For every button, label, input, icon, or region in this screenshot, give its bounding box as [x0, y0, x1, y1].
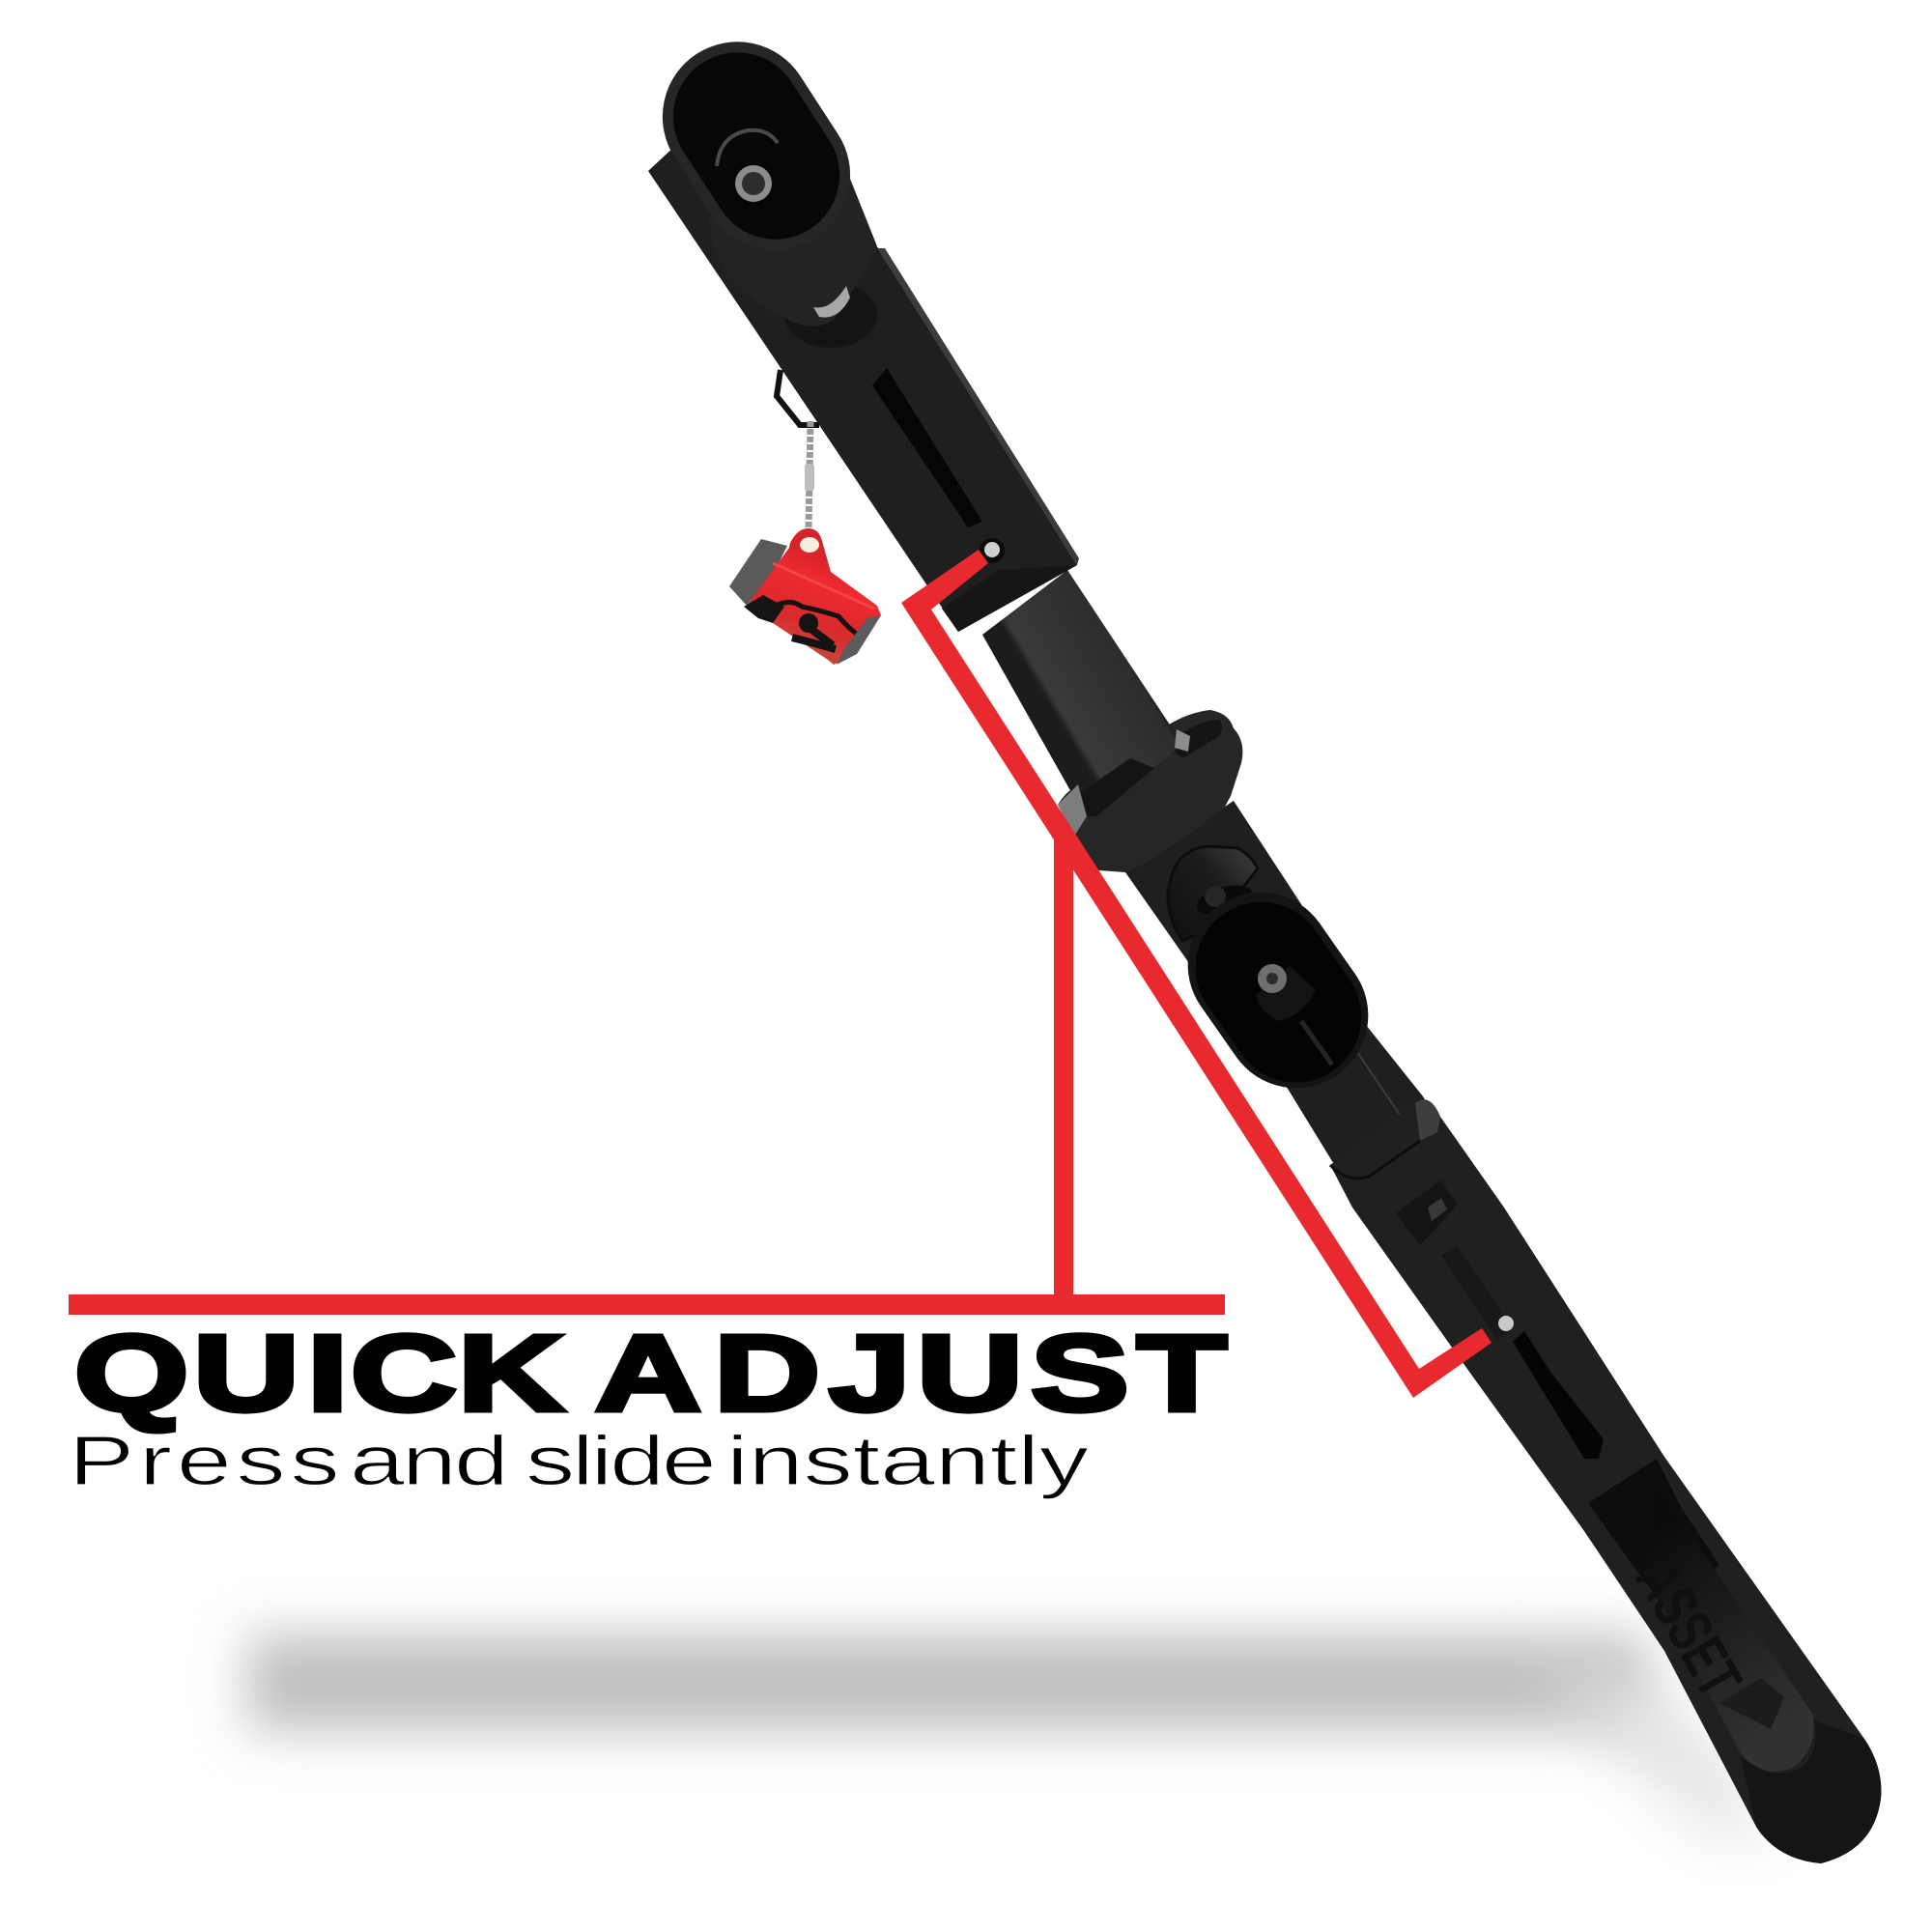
- callout: horizontal rule: [69, 1294, 1225, 1315]
- lower cup: [1159, 864, 1397, 1117]
- top mount collar: [784, 282, 877, 348]
- top cup: [641, 20, 871, 271]
- top mount strap band: [709, 174, 877, 327]
- top cup washer arc: [717, 130, 778, 166]
- foot arrow mark: [1719, 1678, 1784, 1729]
- lower slot: [1513, 1331, 1604, 1459]
- lower sleeve latch detail: [1396, 1180, 1513, 1341]
- lower cup washer: [1256, 966, 1316, 1021]
- lower cup slit: [1301, 1021, 1332, 1065]
- foot tip shade: [1741, 1719, 1881, 1863]
- subheading: and: [350, 1422, 506, 1499]
- product: adjustable rod: [641, 20, 1881, 1863]
- foot recess: [1644, 1485, 1814, 1772]
- lower sleeve seam and bumps: [1330, 1099, 1440, 1179]
- upper sleeve end shade: [942, 565, 1077, 632]
- callout: vertical leader: [1054, 837, 1073, 1296]
- bowl left edge: [1058, 784, 1087, 837]
- bowl screw: [1175, 729, 1190, 752]
- keychain hook: [777, 370, 819, 425]
- upper slot: [872, 368, 982, 527]
- lower cup screw: [1258, 964, 1287, 993]
- floor shadow: [247, 1634, 1777, 1835]
- heading: QUICK ADJUST: [74, 1313, 1227, 1434]
- top mount nut: [813, 286, 850, 318]
- callout: bracket line pointing to both adjusters: [901, 550, 1492, 1398]
- lower sleeve screw: [1498, 1316, 1514, 1331]
- subheading: Press: [69, 1422, 344, 1499]
- upper sleeve: [648, 145, 1077, 632]
- inner square tube: [982, 570, 1182, 816]
- subheading: slide: [526, 1422, 714, 1499]
- embossed foot lettering: ASSET: [1623, 1548, 1755, 1709]
- subheading: instantly: [726, 1422, 1090, 1499]
- lower sleeve and foot: [1330, 1099, 1881, 1863]
- ball chain: [805, 421, 814, 530]
- red charm: [729, 528, 881, 665]
- upper screw: [980, 538, 1005, 563]
- bowl rim shadow: [1166, 720, 1222, 758]
- middle bowl: [1058, 710, 1242, 872]
- foot dark patch: [1588, 1459, 1719, 1604]
- slot screw: [1193, 880, 1257, 921]
- lower tube section: [1125, 801, 1432, 1177]
- central slot window: [1168, 846, 1258, 941]
- tube end in bowl: [1081, 758, 1154, 816]
- top cup screw: [735, 165, 772, 202]
- upper sleeve edge highlight: [877, 248, 1079, 565]
